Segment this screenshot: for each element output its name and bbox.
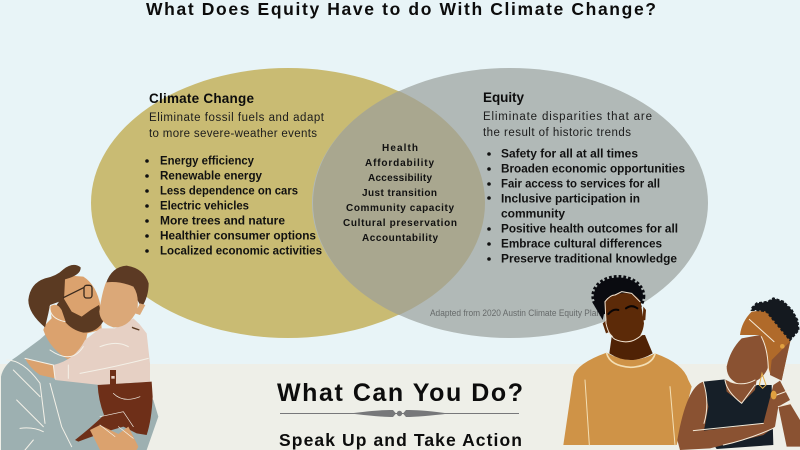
climate bullet list [145, 156, 322, 258]
panel: shared overlap list: Community capacity [346, 203, 454, 214]
panel: climate change [145, 91, 325, 258]
climate description: Eliminate fossil fuels and adapt [149, 112, 325, 124]
equity description: the result of historic trends [483, 127, 631, 139]
equity bullet list [487, 148, 685, 266]
venn diagram [91, 68, 708, 338]
equity bullet list: Fair access to services for all [501, 178, 660, 190]
equity description [483, 111, 652, 139]
ornamental divider [280, 410, 519, 417]
panel: shared overlap list: Accessibility [368, 173, 432, 184]
equity description: Eliminate disparities that are [483, 111, 652, 123]
climate bullet list: Renewable energy [160, 170, 263, 182]
climate change circle [91, 68, 485, 338]
equity bullet list: Embrace cultural differences [501, 238, 662, 250]
equity circle [312, 68, 708, 338]
heading: climate change: Climate Change [149, 91, 254, 106]
climate bullet list: Electric vehicles [160, 200, 249, 212]
climate bullet list: Energy efficiency [160, 156, 255, 168]
equity bullet list: community [501, 208, 566, 220]
illustration: thoughtful woman [677, 298, 800, 450]
climate bullet list: Localized economic activities [160, 246, 322, 258]
panel: shared overlap list: Affordability [365, 158, 434, 169]
climate bullet list: Healthier consumer options [160, 230, 316, 242]
equity bullet list: Positive health outcomes for all [501, 224, 678, 236]
panel: shared overlap list: Accountability [362, 233, 438, 244]
equity bullet list: Safety for all at all times [501, 148, 638, 160]
panel: shared overlap list: Health [382, 143, 418, 154]
climate description [149, 112, 325, 140]
panel: shared overlap list [343, 143, 457, 244]
climate bullet list: Less dependence on cars [160, 186, 298, 198]
equity bullet list: Preserve traditional knowledge [501, 254, 677, 266]
illustration: father holding child [1, 265, 158, 450]
subheading: speak up and take action: Speak Up and Take Action [279, 430, 522, 450]
panel: shared overlap list: Cultural preservation [343, 218, 457, 229]
panel: equity [483, 90, 685, 266]
panel: shared overlap list: Just transition [362, 188, 437, 199]
overlap [313, 91, 485, 315]
heading: what can you do: What Can You Do? [277, 379, 523, 407]
source note: Adapted from 2020 Austin Climate Equity Plan [430, 308, 601, 318]
climate bullet list: More trees and nature [160, 216, 285, 228]
equity bullet list: Inclusive participation in [501, 194, 640, 206]
climate description: to more severe-weather events [149, 128, 317, 140]
illustration: young man with eyes closed [563, 277, 692, 445]
bottom band [0, 364, 800, 450]
equity bullet list: Broaden economic opportunities [501, 164, 685, 176]
heading: equity: Equity [483, 90, 524, 105]
